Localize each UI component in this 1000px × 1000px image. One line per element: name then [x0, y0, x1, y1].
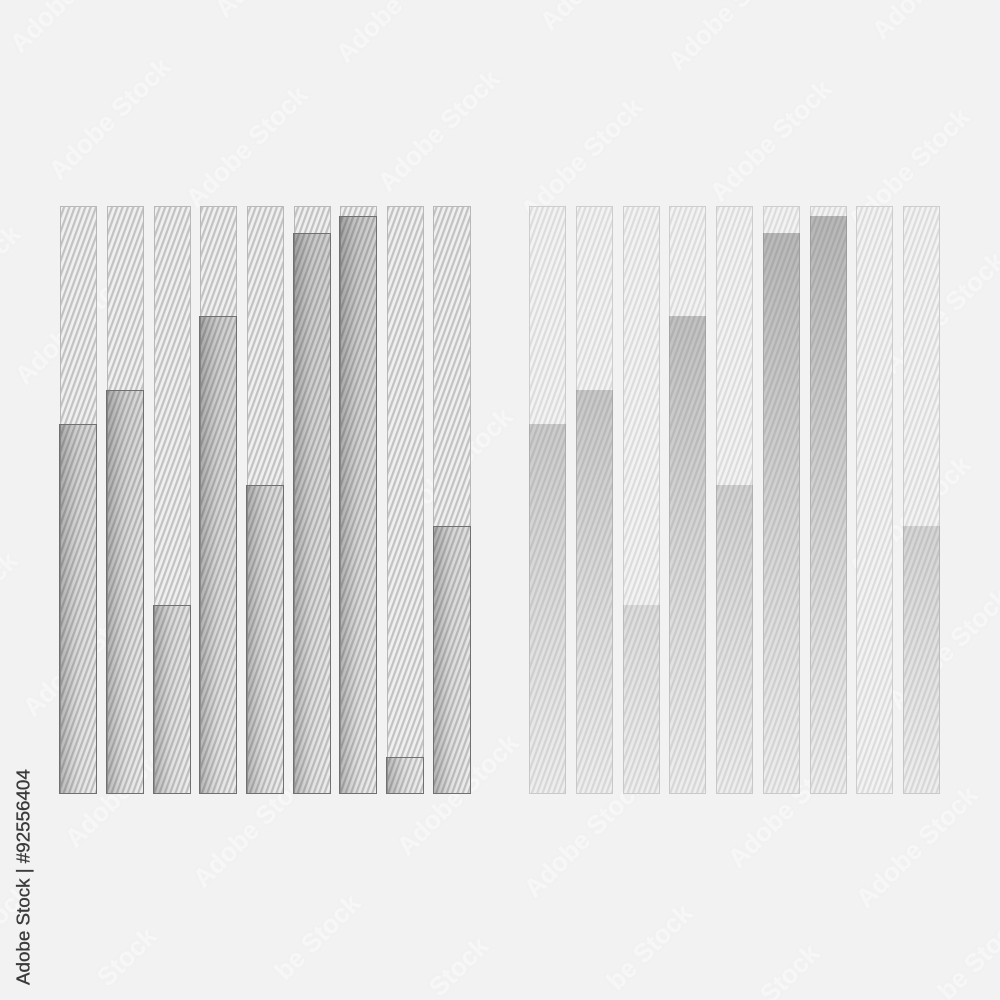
- left bar chart: [60, 206, 470, 794]
- right bar 6: [763, 206, 800, 794]
- left bar 3: [154, 206, 190, 794]
- left bar 4: [200, 206, 236, 794]
- right bar 9: [903, 206, 940, 794]
- watermarks: Adobe Stock: [842, 101, 976, 235]
- watermarks: Adobe Stock: [180, 79, 314, 213]
- right bar 4: [669, 206, 706, 794]
- watermarks: Adobe Stock: [391, 727, 525, 861]
- watermarks: Adobe Stock: [372, 63, 506, 197]
- left bar 7: [340, 206, 376, 794]
- watermarks: Adobe Stock: [9, 256, 143, 390]
- right bar 5: [716, 206, 753, 794]
- watermarks: Adobe Stock: [722, 739, 856, 873]
- watermarks: Adobe Stock: [518, 769, 652, 903]
- watermarks: Adobe Stock: [17, 588, 151, 722]
- left bar 2: [106, 206, 144, 794]
- right bar chart: [529, 206, 940, 794]
- left bar 5: [246, 206, 284, 794]
- watermarks: Adobe Stock: [850, 779, 984, 913]
- right bar 1: [529, 206, 566, 794]
- right bar 7: [810, 206, 847, 794]
- watermarks: be Stock: [600, 898, 698, 996]
- right bar 3: [623, 206, 660, 794]
- watermarks: Adobe Stock: [704, 73, 838, 207]
- watermarks: Adobe Stock: [843, 449, 977, 583]
- watermarks: Stock: [91, 921, 162, 992]
- left bar 8: [386, 206, 424, 794]
- watermarks: Adobe Stock: [187, 759, 321, 893]
- left bar 9: [434, 206, 470, 794]
- right bar 8: [856, 206, 892, 794]
- watermarks: Adobe Stock: [43, 51, 177, 185]
- left bar 6: [294, 206, 330, 794]
- watermarks: Adobe Stock: [385, 401, 519, 535]
- stock id text: Adobe Stock | #92556404: [12, 769, 34, 985]
- watermarks: Adobe Stock: [515, 91, 649, 225]
- right bar 2: [576, 206, 613, 794]
- left bar 1: [60, 206, 96, 794]
- watermarks: Adobe Stock: [59, 719, 193, 853]
- watermarks: be Stock: [268, 888, 366, 986]
